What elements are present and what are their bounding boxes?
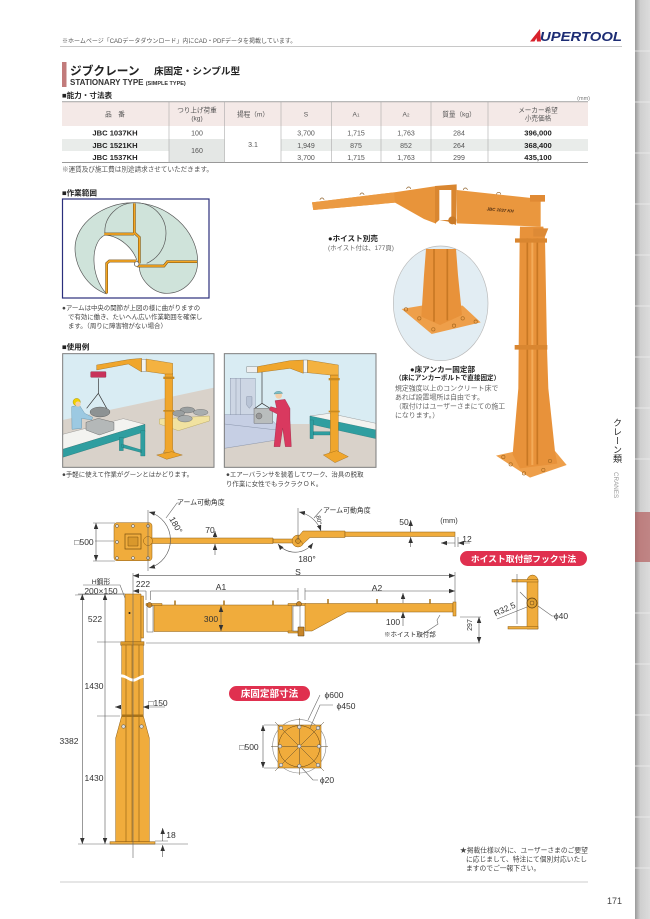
title [62,62,240,87]
active tab [635,512,650,562]
custom order note: ★掲載仕様以外に、ユーザーさまのご要望 [460,846,588,854]
worker [269,391,291,447]
front view dimensions [75,572,481,858]
anchor note [395,364,505,420]
hoist note [328,233,394,252]
spec table: A2 [403,112,410,118]
base plate [496,451,567,478]
work range description [62,303,202,330]
usage heading: ■使用例 [62,342,90,352]
anchor note: 規定強度以上のコンクリート床で [395,384,498,392]
base plate detail [239,690,356,785]
hoist hook detail: ϕ40 [554,611,568,621]
spec table: つり上げ荷重 [177,106,217,114]
anchor note: （床にアンカーボルトで直接固定） [395,373,500,382]
spec table: 852 [400,143,412,150]
spec table: 質量（kg） [442,110,476,118]
top view labels: 180° [167,515,185,535]
top view drawing [93,503,470,571]
front view labels: 3382 [60,736,79,746]
spec table: 品 番 [105,110,125,118]
front view labels: 100 [386,617,400,627]
anchor note: ●床アンカー固定部 [410,364,475,374]
side index strip [635,0,650,919]
top view labels: アーム可動角度 [177,498,225,506]
break mark [119,674,146,682]
hoist hook detail [492,574,568,629]
front view labels [60,567,474,840]
side label: CRANES [612,472,619,498]
title: STATIONARY TYPE (SIMPLE TYPE) [70,78,186,87]
spec table: 1,763 [397,130,415,138]
worker [72,398,93,429]
hoist note: (ホイスト付は、177頁) [328,243,394,252]
usage scene 1 [63,354,214,467]
header note: ※ホームページ「CADデータダウンロード」内にCAD・PDFデータを掲載しています。 [62,37,296,45]
table footnote: ※運賃及び施工費は別途請求させていただきます。 [62,164,213,174]
front view labels: 18 [166,830,176,840]
spec table: 揚程（m） [237,110,269,118]
spec table: 875 [350,143,362,150]
side label [612,418,622,498]
anchor note: （取付けはユーザーさまにての施工 [395,402,505,410]
front view labels: A1 [216,582,226,592]
spec table: 100 [191,130,203,138]
unit: (mm) [577,96,590,102]
front view labels: A2 [372,583,382,593]
spec table [62,101,588,163]
spec table: メーカー希望 [518,106,558,114]
top view labels: 50 [399,517,409,527]
custom order note [460,846,588,872]
work range description: ます。（周りに障害物がない場合） [68,321,167,330]
spec table: 264 [453,143,465,150]
usage captions: り作業に女性でもラクラクＯＫ。 [226,479,322,488]
column [513,227,557,468]
hoist hook pill: ホイスト取付部フック寸法 [471,553,576,564]
top view labels: (mm) [440,516,458,525]
page number: 171 [607,896,622,906]
front view labels: □150 [148,698,168,708]
usage captions: ●エアーバランサを装着してワーク、治具の脱取 [226,470,364,478]
product photo: crane [312,184,567,478]
spec table: JBC 1037KH [92,128,138,138]
load [86,378,114,435]
top view labels: 80° [314,515,322,526]
usage captions: ●手軽に使えて作業がグーンとはかどります。 [62,470,193,478]
title: 床固定・シンプル型 [154,66,240,78]
spec table: 1,715 [347,155,365,162]
spec table: S [304,112,309,118]
side label: クレーン類 [612,418,622,464]
custom order note: ますのでご一報下さい。 [466,864,540,872]
base pill [229,686,310,701]
spec table: 435,100 [524,153,552,162]
spec table: 368,400 [524,141,552,150]
spec table: JBC 1521KH [92,141,138,150]
front view labels: 297 [467,619,474,631]
product photo: crane: JBC 1037 KH [487,206,515,214]
hoist hook detail: R32.5 [492,600,517,618]
spec table: 396,000 [524,128,552,138]
hoist hook pill [460,551,587,566]
front view drawing [110,594,456,844]
spec table: 3,700 [297,155,315,162]
work range description: で有効に働き、たいへん広い作業範囲を確保し [68,312,202,321]
work range heading: ■作業範囲 [62,188,97,198]
anchor note: あれば設置場所は自由です。 [395,392,484,402]
top view labels: 180° [298,554,316,564]
top view labels: 12 [462,534,472,544]
top view labels: □500 [74,537,94,547]
usage captions [62,470,364,488]
front view labels: 300 [204,614,218,624]
hoist [91,372,106,377]
front view labels: 1430 [85,773,104,783]
conveyor [63,419,145,457]
hoist note: ●ホイスト別売 [328,233,378,243]
spec table: 299 [453,155,465,162]
front view labels: 522 [88,614,102,624]
load [254,372,273,423]
title: ジブクレーン [70,64,140,78]
front view labels: 1430 [85,681,104,691]
base plate detail: □500 [239,742,259,752]
front view labels: ※ホイスト取付部 [384,630,436,638]
spec table: 1,949 [297,143,315,150]
anchor detail circle [393,246,488,361]
conveyor [310,413,376,439]
pallet with bowls [159,407,209,431]
spec table: 1,763 [397,155,415,162]
base plate detail: ϕ20 [320,775,334,785]
balancer [247,367,257,372]
spec table: 160 [191,148,203,155]
work range description: ●アームは中央の関節が上図の様に曲がりますの [62,303,200,312]
spec table: 3.1 [248,142,258,149]
spec table: (kg) [191,116,203,122]
work range diagram [62,199,209,298]
table heading: ■能力・寸法表 [62,90,113,100]
column [257,360,348,463]
top view labels [74,498,472,564]
spec table: 小売価格 [525,114,552,122]
anchor note: になります。） [395,412,439,420]
arm [147,606,153,632]
custom order note: に応じまして、特注にて個別対応いたし [466,854,587,864]
front view labels: 200×150 [84,586,118,596]
column [97,358,182,459]
spec table: 1,715 [347,130,365,138]
front view labels: H鋼形 [92,577,110,586]
spec table: 3,700 [297,130,315,138]
front view labels: S [295,567,301,577]
logo: UPERTOOL [540,29,622,44]
spec table: 284 [453,130,465,138]
usage scene 2 [224,354,376,467]
top view labels: 70 [205,525,215,535]
top view labels: アーム可動角度 [323,506,371,514]
base plate detail: ϕ600 [325,690,344,700]
front view labels: 222 [136,579,150,589]
spec table: A1 [353,112,360,118]
machine [224,378,277,448]
spec table: JBC 1537KH [92,153,138,162]
base plate detail: ϕ450 [337,701,356,711]
arm angle dimensions [93,503,470,571]
base pill: 床固定部寸法 [241,688,299,700]
